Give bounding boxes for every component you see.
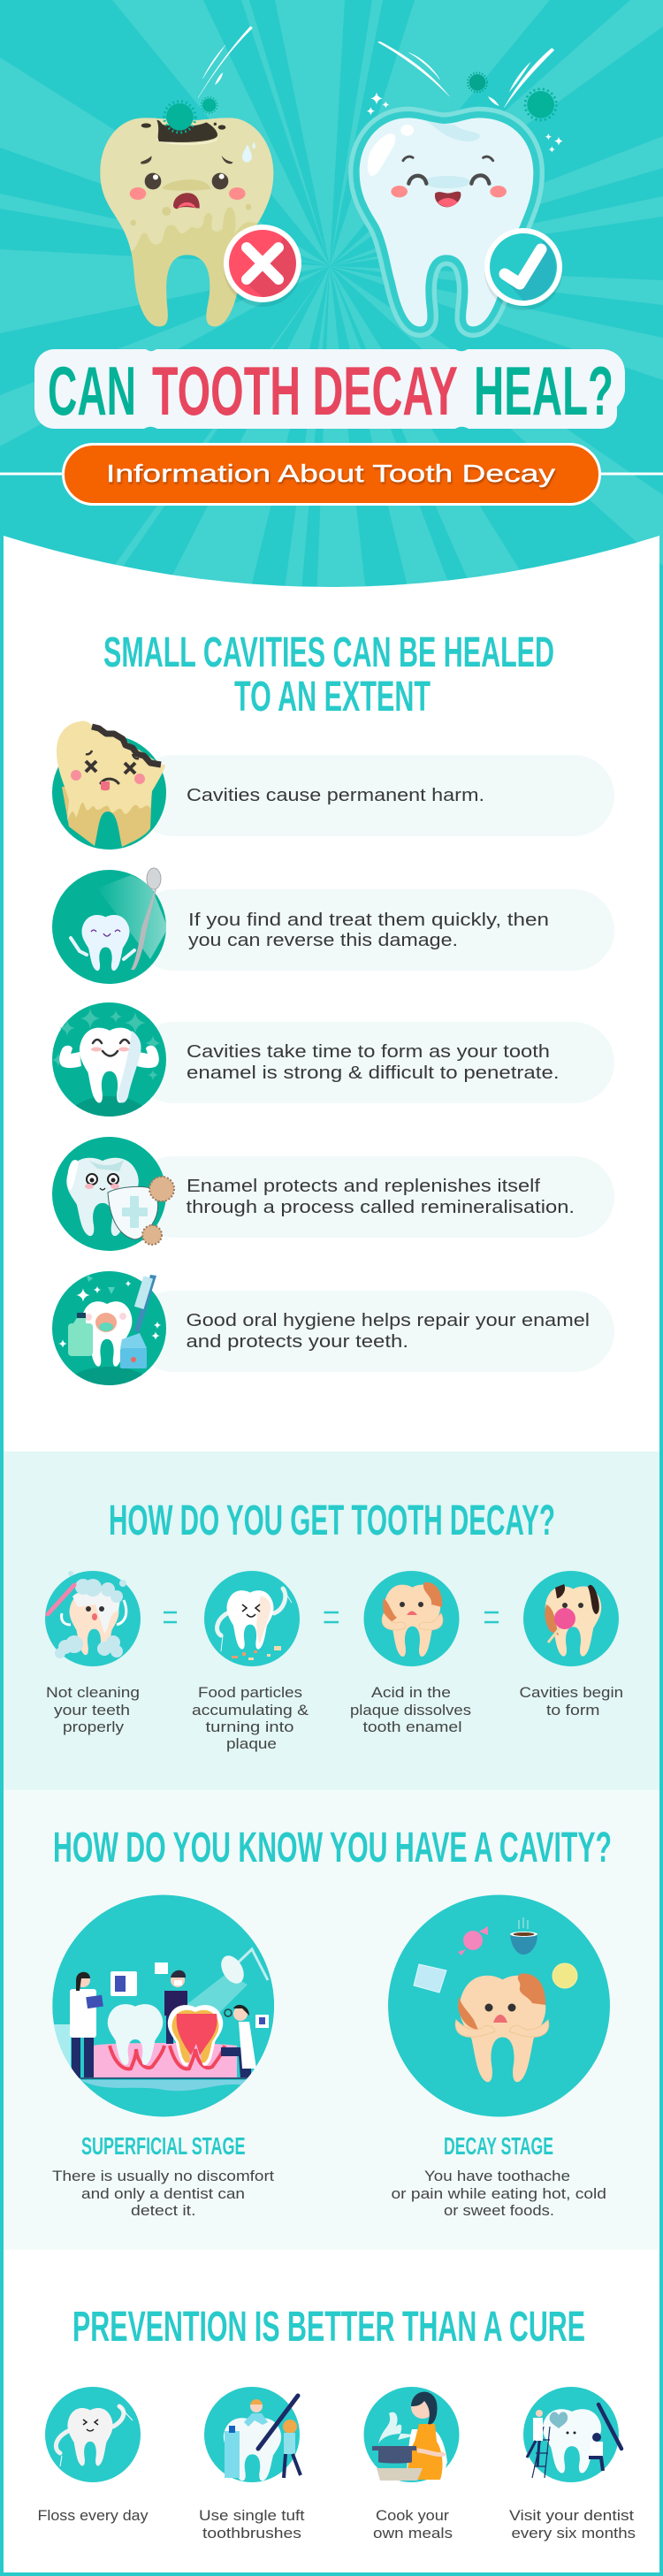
cook caption xyxy=(373,2507,453,2542)
step 3 caption xyxy=(350,1684,471,1735)
step 1 caption: your teeth xyxy=(54,1702,130,1719)
step 2: food particles xyxy=(192,1571,309,1752)
toothbrush caption xyxy=(199,2507,305,2542)
white page body with curved top xyxy=(4,536,659,2572)
subtitle banner xyxy=(0,444,663,504)
header sunburst rays xyxy=(0,0,663,601)
step 1: not cleaning teeth xyxy=(45,1571,141,1735)
step 3: acid dissolves enamel xyxy=(350,1571,471,1735)
row 2: find and treat quickly: If you find and treat them quickly, then xyxy=(188,911,549,930)
row 1: permanent harm xyxy=(52,721,614,850)
icon: decayed tooth xyxy=(100,26,274,327)
step 4: cavities form xyxy=(520,1571,623,1719)
superficial stage text: SUPERFICIAL STAGE xyxy=(81,2132,246,2160)
row 5: good oral hygiene: Good oral hygiene helps repair your enamel xyxy=(186,1311,590,1330)
dentist caption: Visit your dentist xyxy=(509,2507,634,2524)
row 2: find and treat quickly xyxy=(52,868,614,984)
equals sign 1 xyxy=(164,1612,177,1622)
step 2 caption: accumulating & xyxy=(192,1702,309,1719)
subtitle banner: Information About Tooth Decay xyxy=(106,460,555,487)
row 3: enamel is strong xyxy=(51,1002,614,1117)
prevention: visit your dentist xyxy=(509,2387,636,2542)
superficial stage text: detect it. xyxy=(131,2202,196,2219)
icon: check badge xyxy=(484,228,562,310)
step 1 caption xyxy=(46,1684,140,1735)
row 5: good oral hygiene xyxy=(52,1271,614,1385)
icon: healthy tooth xyxy=(360,42,563,326)
row 4: remineralisation: Enamel protects and replenishes itself xyxy=(187,1177,541,1196)
step 4 caption: Cavities begin xyxy=(520,1684,623,1701)
step 2 caption xyxy=(192,1684,309,1752)
floss caption: Floss every day xyxy=(37,2507,149,2524)
row 3: enamel is strong: Cavities take time to form as your tooth xyxy=(187,1042,550,1062)
cook caption: Cook your xyxy=(376,2507,449,2524)
title: TOOTH DECAY xyxy=(152,352,458,430)
superficial stage text: There is usually no discomfort xyxy=(52,2168,274,2184)
decay stage text: or pain while eating hot, cold xyxy=(391,2185,606,2202)
equals sign 2 xyxy=(324,1612,339,1622)
title: CAN xyxy=(48,352,136,430)
superficial stage illustration xyxy=(52,1895,274,2116)
cook caption: own meals xyxy=(373,2525,453,2542)
panel: how do you get tooth decay xyxy=(4,1452,659,1790)
step 3 caption: Acid in the xyxy=(371,1684,451,1701)
step 1 caption: properly xyxy=(63,1719,125,1735)
row 5: good oral hygiene: and protects your teeth. xyxy=(186,1332,408,1352)
step 1 caption: Not cleaning xyxy=(46,1684,140,1701)
step 2 caption: turning into xyxy=(205,1719,293,1735)
step 4 caption xyxy=(520,1684,623,1719)
row 2: find and treat quickly: you can reverse this damage. xyxy=(188,931,458,950)
icon: cross badge xyxy=(224,225,301,307)
decay stage text: You have toothache xyxy=(424,2168,570,2184)
row 4: remineralisation: through a process called remineralisation. xyxy=(186,1198,575,1217)
dentist caption xyxy=(509,2507,636,2542)
decay stage illustration xyxy=(388,1895,610,2116)
decay stage text: or sweet foods. xyxy=(444,2202,554,2219)
equals sign 3 xyxy=(484,1612,499,1622)
step 4 caption: to form xyxy=(546,1702,599,1719)
step 2 caption: plaque xyxy=(226,1735,277,1752)
dentist caption: every six months xyxy=(511,2525,636,2542)
panel: how do you know you have a cavity xyxy=(4,1790,659,2250)
toothbrush caption: toothbrushes xyxy=(202,2525,301,2542)
heading: small cavities xyxy=(103,629,554,720)
superficial stage text xyxy=(52,2132,274,2219)
step 2 caption: Food particles xyxy=(198,1684,302,1701)
row 4: remineralisation xyxy=(52,1137,614,1251)
heading: small cavities: TO AN EXTENT xyxy=(234,674,431,720)
row 1: permanent harm: Cavities cause permanent harm. xyxy=(187,786,484,805)
prevention: floss xyxy=(37,2387,149,2524)
prevention: cook your own meals xyxy=(364,2387,460,2542)
prevention: single tuft toothbrushes xyxy=(199,2387,305,2542)
decay stage text xyxy=(391,2132,606,2219)
row 3: enamel is strong: enamel is strong & difficult to penetrate. xyxy=(187,1063,559,1083)
toothbrush caption: Use single tuft xyxy=(199,2507,305,2524)
superficial stage text: and only a dentist can xyxy=(81,2185,245,2202)
step 3 caption: tooth enamel xyxy=(362,1719,461,1735)
decay stage text: DECAY STAGE xyxy=(444,2132,553,2160)
step 3 caption: plaque dissolves xyxy=(350,1702,471,1719)
